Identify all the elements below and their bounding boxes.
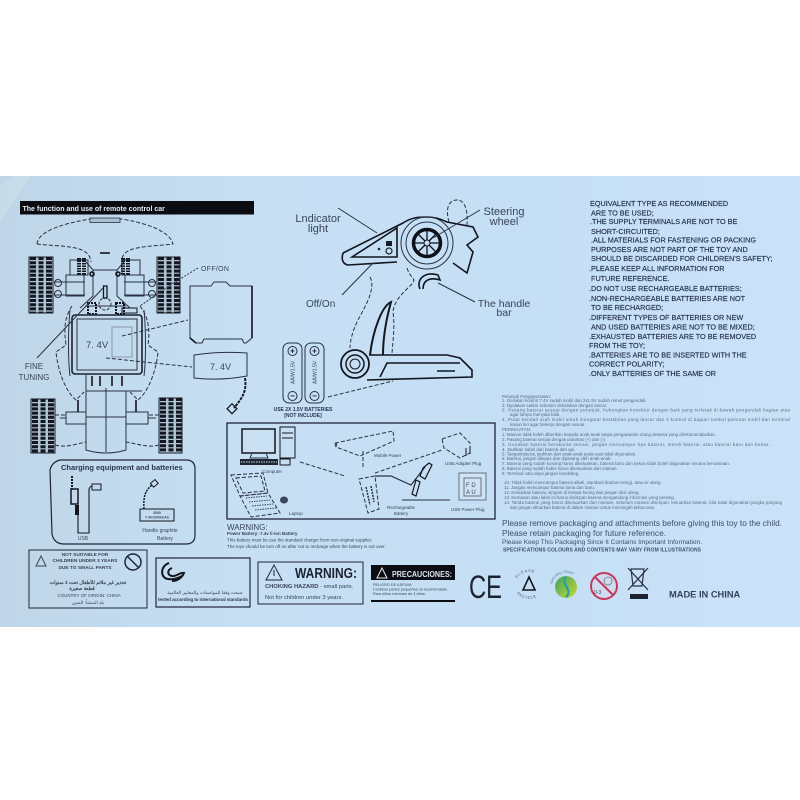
icon: crescent logo (162, 563, 184, 581)
Indonesian instructions small text: agar lampu menyala baik. (510, 412, 560, 417)
rear gearbox (55, 375, 159, 453)
panel: not suitable notice (29, 550, 147, 608)
base (341, 350, 472, 380)
icon: not for ages 0-3 (591, 573, 617, 599)
label: steering wheel: Steering (484, 206, 524, 218)
warning text column: .BATTERIES ARE TO BE INSERTED WITH THE (589, 350, 747, 360)
panel: charging equipment and batteries (50, 460, 195, 544)
remote controller diagram (295, 200, 530, 380)
label: computer: Computer (262, 469, 282, 474)
icon: please recycle: PLEASE (515, 569, 534, 578)
made in china: MADE IN CHINA (669, 590, 741, 600)
battery caption: USE 2X 1.5V BATTERIES (274, 407, 333, 413)
label: battery: Battery (157, 536, 173, 542)
battery compartment (72, 315, 142, 374)
indicator light and switch (378, 241, 392, 254)
packaging notes: Please Keep This Packaging Since It Contains Important Information. (502, 539, 702, 546)
battery 2: AA/W1.5V (312, 360, 318, 384)
panel: precauciones: Para niños menores de 3 años. (373, 592, 426, 596)
battery 1 (283, 343, 302, 403)
warning text column: TO BE RECHARGED; (591, 303, 663, 312)
icon: rechargeable battery: 7.4V/1000mAh (145, 516, 169, 520)
worn corner streaks (0, 176, 30, 222)
label: off on: Off/On (306, 299, 335, 310)
battery pack (194, 352, 247, 414)
label: usb: USB (78, 536, 89, 542)
panel: choking hazard warning: Not for children under 3 years. (265, 595, 343, 601)
battery 1: + (290, 346, 295, 356)
icon: please recycle: RECYCLE (517, 592, 536, 599)
warning text column: .ONLY BATTERIES OF THE SAME OR (589, 369, 716, 378)
icon: green dot: NATURAL POINT (550, 570, 574, 584)
panel: precauciones: Contiene partes pequeñas no recomendado (373, 588, 447, 592)
icon: green dot (550, 570, 577, 598)
warning text block: The toys should be turn off on after not to recharge when the battery is not over. (227, 544, 386, 549)
warning text column: .EXHAUSTED BATTERIES ARE TO BE REMOVED (589, 332, 756, 341)
warning text column: SHORT-CIRCUITED; (591, 227, 660, 236)
warning text column: SHOULD BE DISCARDED FOR CHILDREN'S SAFETY; (591, 254, 772, 263)
warning text column: EQUIVALENT TYPE AS RECOMMENDED (590, 199, 728, 208)
panel: standards notice: tested according to international standards (158, 597, 248, 603)
Indonesian instructions small text: 2. Pasang baterai sesuai dengan polaritas (+) dan (-). (502, 437, 606, 442)
tire: rear right (159, 398, 182, 453)
panel: not suitable notice: قطعة صغيرة (69, 586, 95, 592)
battery caption: [NOT INCLUDE] (284, 413, 322, 419)
steering wheel (401, 217, 453, 269)
batteries icon (274, 343, 393, 419)
icon: usb adapter plug (442, 433, 482, 466)
Indonesian instructions small text: 10. Tidak boleh mencampur baterai alkali, standard (karbon-seng), atau isi ulang. (504, 480, 662, 485)
Indonesian instructions small text: 8. Baterai yang sudah habis harus dikeluarkan dari mainan. (502, 466, 618, 471)
icon: warning triangle (377, 568, 387, 578)
panel: precauciones: PRECAUCIONES: (392, 570, 452, 579)
warning text column: .THE SUPPLY TERMINALS ARE NOT TO BE (590, 217, 738, 226)
label: indicator light: light (308, 223, 328, 235)
icon: rechargeable battery and cable (359, 463, 450, 516)
panel: package back background (0, 176, 800, 627)
leader line: fine tuning (37, 288, 103, 358)
Indonesian instructions small text: 1. Mainan tidak boleh diberikan kepada anak-anak tanpa pengawasan orang dewasa yang direkomendasikan. (502, 432, 716, 437)
label: usb power plug: USB Power Plug (451, 507, 485, 512)
Indonesian instructions small text: 9. Terminal catu daya jangan korsleting. (502, 471, 579, 476)
packaging notes: Please retain packaging for future reference. (502, 528, 666, 538)
Indonesian instructions small text (502, 394, 791, 510)
packaging notes: SPECIFICATIONS COLOURS AND CONTENTS MAY VARY FROM ILLUSTRATIONS (503, 548, 702, 554)
packaging notes (502, 518, 782, 554)
tire: rear left (31, 399, 55, 453)
dashed line to base (328, 381, 393, 397)
warning title: WARNING: (295, 566, 357, 582)
battery 2: + (312, 346, 317, 356)
icon: laptop (231, 473, 303, 517)
label: rechargeable battery: Rechargeable (387, 505, 416, 510)
label: battery: Handle graphite (142, 528, 178, 534)
Indonesian instructions small text: Petunjuk Pengoperasian: (502, 394, 551, 399)
warning text column: .DO NOT USE RECHARGEABLE BATTERIES; (589, 284, 742, 293)
panel: standards notice (156, 558, 250, 607)
label: usb adapter plug: USB Adapter Plug (445, 461, 482, 466)
panel: precauciones: PELIGRO DE ASFIXIA (373, 583, 412, 587)
car chassis diagram (19, 218, 252, 453)
panel: choking hazard warning: CHOKING HAZARD - small parts. (265, 584, 354, 590)
panel: choking hazard warning (258, 562, 363, 604)
warning text block: This battery must be use the standard charger from non-original supplier. (227, 538, 372, 542)
battery cover (190, 282, 252, 343)
icon: usb power plug (451, 473, 486, 512)
icon: rechargeable battery: 2000 (153, 511, 161, 515)
warning text block: WARNING: (227, 523, 268, 532)
warning text column: .NON-RECHARGEABLE BATTERIES ARE NOT (589, 294, 746, 303)
panel: precauciones (371, 565, 455, 602)
panel: not suitable notice: CHILDREN UNDER 3 YEARS (53, 558, 118, 564)
packaging notes: Please remove packaging and attachments before giving this toy to the child. (502, 518, 782, 528)
Indonesian instructions small text: 13. Kemasan atau label ini harus disimpan karena mengandung informasi yang penting. (504, 495, 675, 500)
panel heading: Charging equipment and batteries (61, 463, 183, 472)
battery 2: − (312, 392, 317, 400)
battery 2 (305, 343, 324, 403)
front suspension (54, 253, 156, 314)
Indonesian instructions small text: 2. Nyalakan saklar sebelum dimainkan dengan lancar. (502, 403, 607, 408)
icon: no children (125, 554, 141, 570)
leader line: off/on (140, 268, 198, 306)
Indonesian instructions small text: 11. Jangan mencampur baterai lama dan baru. (504, 485, 595, 490)
label: rechargeable battery: Battery (394, 511, 409, 516)
warning text column: PURPOSES ARE NOT PART OF THE TOY AND (591, 245, 748, 254)
icon: usb power plug: A U (466, 490, 476, 496)
tire: front left (29, 257, 53, 313)
warning text column: CORRECT POLARITY; (589, 360, 664, 368)
label: laptop: Laptop (289, 511, 303, 516)
Indonesian instructions small text: 14. Tanda baterai yang harus dikeluarkan dari mainan, sebelum mainan disimpan, keluarkan baterai, bila tidak digunakan jangka panjang (504, 500, 783, 505)
Indonesian instructions small text: 3. Gunakan baterai berukuran sesuai, jangan mencampur tipe baterai, merek baterai, atau baterai baru dan bekas. (502, 442, 770, 447)
warning text column (589, 199, 772, 378)
heading bar: The function and use of remote control car (22, 206, 165, 213)
icon: warning triangle (36, 556, 46, 566)
Indonesian instructions small text: 4. Putar kendali arah mobil untuk mengatur kestabilan yang lancar dan 2 kontrol di bagian tombol pemutar mobil dan terminal (502, 417, 790, 422)
controller neck (350, 268, 414, 353)
connection dashed lines (300, 450, 442, 476)
icon: rechargeable battery (140, 480, 178, 542)
Indonesian instructions small text: 1. Gerakan kontrol 7.4V sudah mobil dan 2x1.5V sudah remot pengendali. (502, 398, 646, 403)
leader lines (338, 208, 480, 302)
dashed lines to cover and battery (106, 320, 192, 367)
label: indicator light: Lndicator (295, 213, 341, 225)
heading bar (20, 201, 254, 214)
warning text column: FUTURE REFERENCE. (591, 274, 669, 283)
grip (370, 302, 391, 355)
Indonesian instructions small text: PERINGATAN: (502, 427, 531, 432)
icon: crossed out bin (628, 568, 648, 599)
Indonesian instructions small text: 7. Baterai yang sudah kosong harus dikeluarkan, baterai baru dan bekas tidak boleh digunakan secara bersamaan. (502, 461, 730, 466)
warning text column: ARE TO BE USED; (591, 208, 654, 218)
Indonesian instructions small text: 4. Jauhkan kabel dan baterai dari api. (502, 447, 575, 452)
Indonesian instructions small text: 12. Keluarkan baterai, simpan di tempat kering dan jangan diisi ulang. (504, 490, 640, 495)
icon: warning triangle (266, 565, 282, 580)
warning text column: .ALL MATERIALS FOR FASTENING OR PACKING (591, 236, 756, 244)
label: fine tuning: FINE (25, 362, 43, 371)
Indonesian instructions small text: kanan kiri agar bekerja dengan sesuai. (510, 422, 585, 427)
warning text column: .DIFFERENT TYPES OF BATTERIES OR NEW (589, 313, 743, 322)
warning text block (227, 523, 386, 549)
panel: not suitable notice: NOT SUITABLE FOR (62, 552, 109, 558)
tire: front right (157, 257, 180, 313)
battery voltage label: 7. 4V (86, 340, 109, 351)
controller head (343, 217, 478, 273)
label: handle bar: The handle (478, 298, 530, 310)
Indonesian instructions small text: 5. Tanganbaterai, jauhkan dari anak-anak pada saat tidak digunakan. (502, 452, 636, 456)
battery pack voltage: 7. 4V (210, 362, 231, 372)
icon: usb cable (71, 476, 101, 542)
chassis outline (56, 306, 158, 400)
panel: not suitable notice: تحذير غير ملائم للأطفال تحت 3 سنوات (50, 578, 127, 586)
warning text block: Power Battery: 7.4v li-ion Battery (227, 531, 298, 536)
icon: usb power plug: F D (466, 483, 476, 489)
warning text column: FROM THE TOY; (589, 341, 645, 350)
icon: desktop computer (240, 427, 295, 474)
Indonesian instructions small text: 6. Baterai, jangan dilepas dan dipasang oleh anak-anak. (502, 456, 612, 461)
label: mobile power: Mobile Power (374, 453, 402, 458)
front bumper (37, 219, 173, 262)
label: handle bar: bar (496, 307, 512, 319)
warning text column: AND USED BATTERIES ARE NOT TO BE MIXED; (591, 322, 755, 332)
panel: not suitable notice: DUE TO SMALL PARTS (58, 565, 112, 571)
icon: not for ages 0-3: 0-3 (594, 590, 601, 596)
label: off/on: OFF/ON (201, 266, 229, 273)
Indonesian instructions small text: dan jangan dibiarkan baterai di dalam mainan untuk mencegah kebocoran. (510, 505, 655, 510)
battery 1: AA/W1.5V (290, 360, 296, 384)
icon: CE mark: CE (469, 569, 502, 605)
label: steering wheel: wheel (489, 216, 518, 228)
label: fine tuning: TUNING (19, 373, 49, 382)
warning text column: .PLEASE KEEP ALL INFORMATION FOR (589, 264, 725, 273)
icon: mobile power (335, 431, 402, 458)
panel: not suitable notice: COUNTRY OF ORIGIN: CHINA (57, 593, 121, 598)
icon: please recycle (515, 569, 536, 599)
battery 1: − (290, 392, 295, 400)
panel: charging connections (227, 423, 495, 519)
Indonesian instructions small text: 3. Pasang baterai sesuai dengan petunjuk, hubungkan konektor dengan baik yang terletak di bawah pengendali bagian atas (502, 408, 791, 412)
panel: standards notice: صنعت وفقا للمواصفات والمعايير العالمية (167, 590, 243, 596)
panel: not suitable notice: بلد المنشأ: الصين (72, 598, 104, 606)
handle bar trigger (419, 274, 440, 289)
